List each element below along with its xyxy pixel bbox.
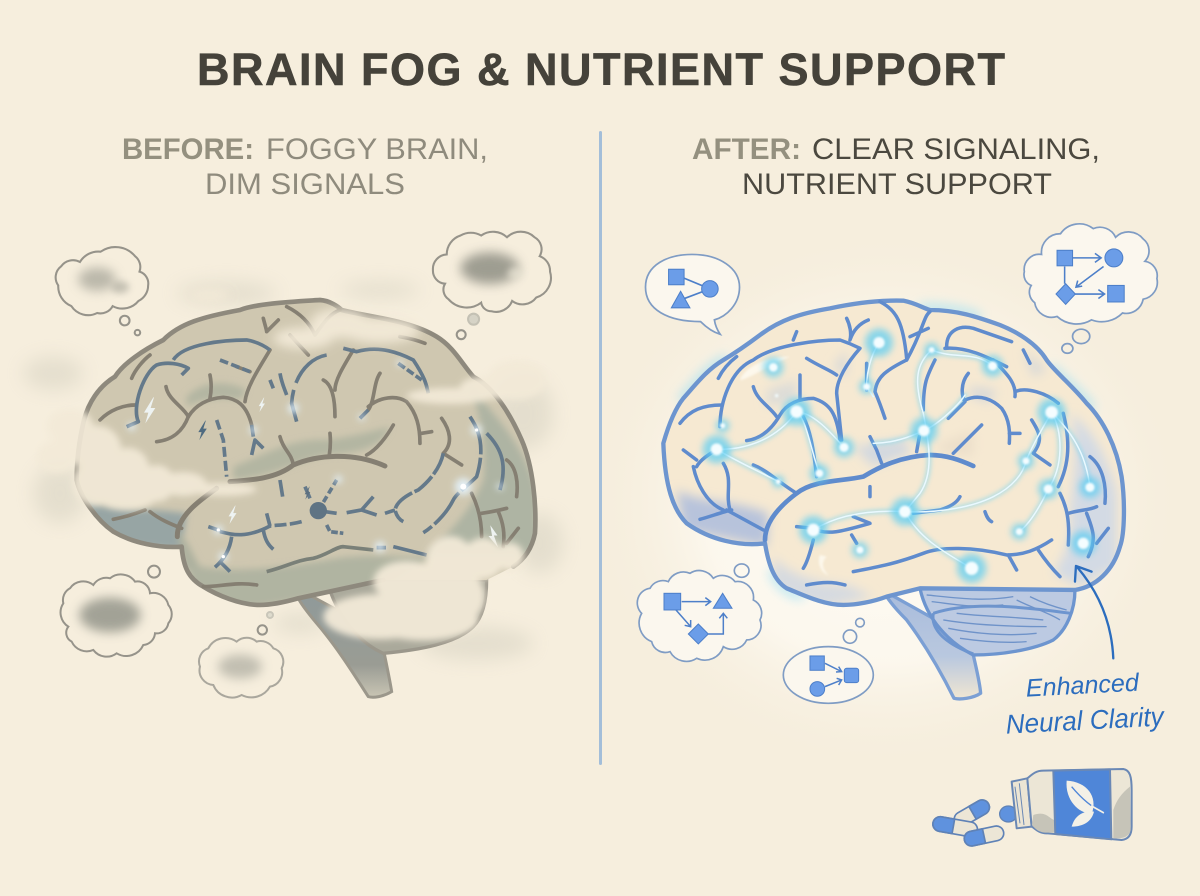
fog cloud: top [190,288,420,349]
heading: before: BEFORE: [122,133,254,166]
foggy brain [23,282,563,698]
clear brain [637,301,1124,703]
cerebrum [663,301,1124,605]
brainstem [298,590,392,697]
fog cloud: lower [323,536,524,641]
fog cloud: left [37,408,257,510]
blue sulci [680,302,1108,585]
glowing nodes: cores [711,337,1095,575]
lightning bolts [144,397,498,547]
leaf icon [1067,781,1103,827]
heading: after: NUTRIENT SUPPORT [742,168,1052,201]
center divider [599,131,602,765]
haze behind brain [23,282,563,660]
arrow to enhanced clarity [1075,566,1113,658]
glowing nodes: halos [703,329,1101,583]
speech bubble [645,254,740,334]
background glow behind clear brain [585,230,1185,770]
thought bubble: lower center [783,618,873,703]
cerebellum [327,580,487,653]
cerebellum [920,588,1075,655]
supplement bottle and capsules [932,769,1132,847]
heading: before [122,133,488,201]
brain outline [77,300,535,605]
fog clouds over brain [37,288,547,641]
heading: after: AFTER: [692,133,801,166]
thought bubble [1024,224,1157,353]
bottle body [1012,769,1132,840]
heading: after: CLEAR SIGNALING, [812,133,1100,166]
fog cloud: right band [407,360,547,404]
capsule spilling from bottle [1000,806,1017,822]
heading: after [692,133,1100,201]
brain outline [663,301,1124,605]
faint sparks [128,360,503,561]
brain outer glow [683,308,1090,595]
grey sulci [100,307,518,587]
thought bubble: lower left [637,564,762,661]
foggy thought bubbles: top [56,232,551,339]
neural signal lines [717,343,1090,568]
speech bubble and thought bubble: upper right [645,224,1157,353]
heading: before: DIM SIGNALS [205,168,405,201]
brain shading [677,350,1117,608]
heading: before: FOGGY BRAIN, [266,133,488,166]
title: BRAIN FOG & NUTRIENT SUPPORT [197,44,1005,95]
capsules [932,797,1005,847]
central node [310,502,327,519]
annotation: enhanced neural clarity [1003,667,1166,740]
blue fading signal paths [127,340,503,572]
foggy thought bubbles: bottom [61,566,283,698]
annotation: enhanced neural clarity: Enhanced [1025,669,1141,703]
brain shading [80,383,537,610]
neural signal glow [717,343,1090,568]
cerebrum [77,300,535,605]
annotation: enhanced neural clarity: Neural Clarity [1005,701,1166,740]
brainstem [887,593,981,699]
